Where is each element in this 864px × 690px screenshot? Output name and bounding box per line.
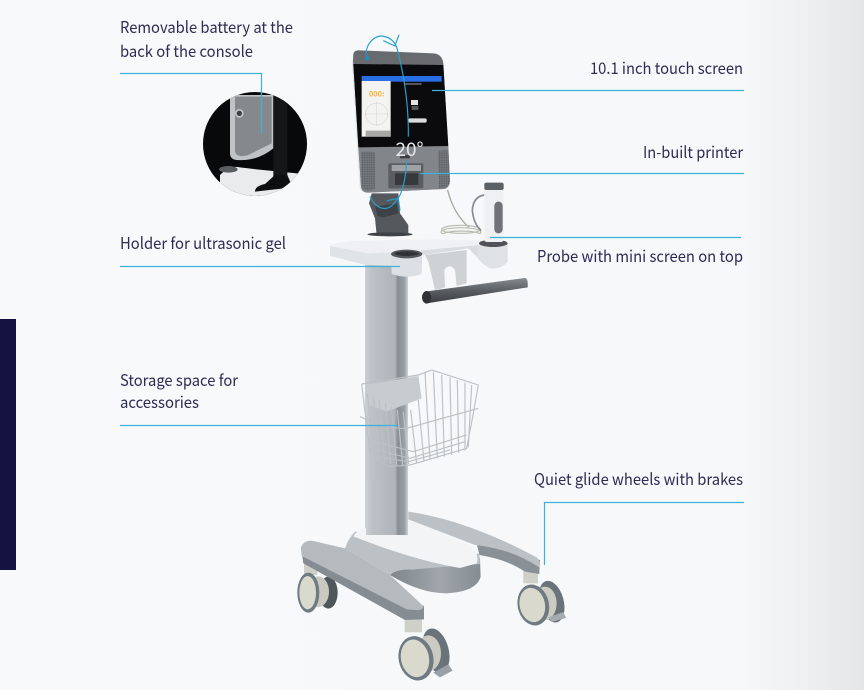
- label: touch screen: 10.1 inch touch screen: [590, 55, 743, 79]
- printer: [388, 163, 423, 188]
- UI gauge: [366, 103, 388, 125]
- rear left wheel: [297, 558, 338, 613]
- left arm top: [301, 541, 423, 610]
- shelf top: [330, 239, 482, 253]
- probe holder: [477, 243, 508, 268]
- UI left panel: [362, 81, 391, 137]
- right wheel: [514, 570, 569, 628]
- angle label: 20°: [395, 135, 424, 162]
- white plate: [354, 519, 477, 568]
- handle bracket: [425, 250, 467, 290]
- right arm top: [408, 512, 540, 567]
- label: gel holder: Holder for ultrasonic gel: [120, 230, 286, 254]
- callout: leader lines: [120, 74, 744, 565]
- mounting plate: [365, 376, 422, 412]
- right arm side: [477, 543, 540, 574]
- callout: battery inset: [203, 92, 307, 196]
- screen: [353, 64, 448, 147]
- label: probe: Probe with mini screen on top: [537, 243, 743, 267]
- monitor body: [353, 50, 450, 193]
- left arm side: [301, 547, 424, 620]
- center top edge: [345, 532, 480, 575]
- speaker left: [361, 152, 375, 191]
- shelf underside right: [420, 245, 480, 260]
- monitor arm: [369, 193, 408, 235]
- label: storage: Storage space for: [120, 367, 239, 391]
- UI probe graphic: [405, 83, 422, 85]
- cable coil: [441, 225, 481, 239]
- monitor bezel edge: [352, 53, 368, 193]
- label: wheels: Quiet glide wheels with brakes: [534, 466, 743, 490]
- rotation arrows: [365, 35, 408, 211]
- handle bar: [425, 278, 528, 303]
- bottom wheel: [394, 618, 454, 684]
- shelf collar: [363, 234, 482, 243]
- lower panel: [358, 146, 450, 193]
- label: printer: In-built printer: [643, 139, 744, 163]
- monitor: [352, 50, 450, 193]
- speaker right: [438, 150, 450, 188]
- center body side: [390, 558, 481, 593]
- UI top bar: [362, 76, 442, 82]
- label: storage line 2: accessories: [120, 389, 199, 413]
- probe cable: [472, 195, 484, 231]
- label: battery: Removable battery at the: [120, 14, 293, 38]
- UI reading: 000:: [369, 89, 384, 100]
- shelf: [330, 183, 528, 304]
- inset circle: [203, 92, 307, 196]
- gel holder: [391, 254, 422, 277]
- pole lower section: [366, 480, 408, 535]
- wheeled base: [297, 512, 569, 684]
- label: battery line 2: back of the console: [120, 38, 253, 62]
- monitor cable: [448, 190, 469, 227]
- basket rims: [362, 370, 478, 467]
- cable and arm: [369, 190, 484, 239]
- shelf front: [330, 246, 393, 266]
- product illustration: ultrasound cart: [297, 35, 569, 684]
- probe: [484, 183, 504, 242]
- dark side tab: [0, 319, 16, 570]
- pole: [365, 262, 408, 537]
- wire basket: [360, 370, 478, 467]
